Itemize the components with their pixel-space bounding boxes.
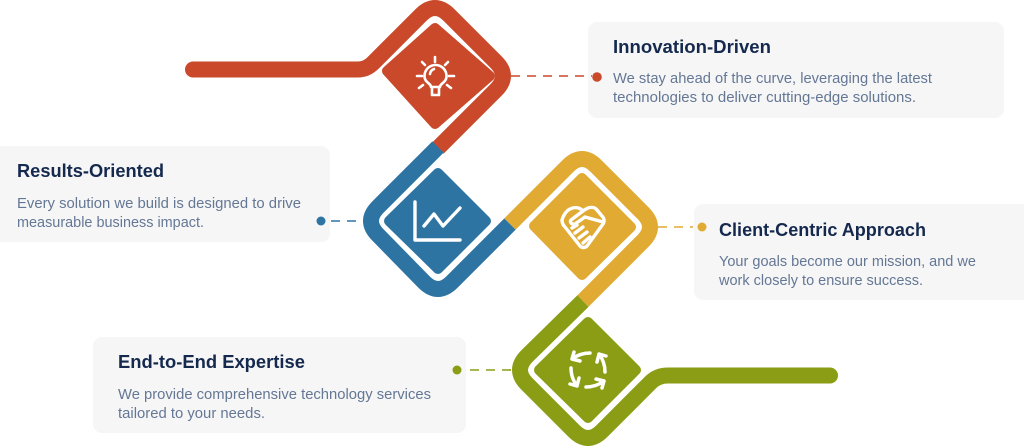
panel: results-oriented card — [0, 146, 330, 242]
icon: light bulb — [417, 57, 454, 95]
text: client description — [718, 254, 976, 289]
panel: end-to-end card — [93, 337, 466, 433]
diamond: blue — [389, 173, 486, 269]
text: client description: work closely to ensure success. — [718, 273, 923, 289]
heading: innovation-driven: Innovation-Driven — [613, 37, 771, 57]
diamond: red — [387, 28, 490, 124]
text: results description: Every solution we build is designed to drive — [17, 196, 301, 212]
text: innovation description — [613, 71, 932, 106]
text: client description: Your goals become our mission, and we — [719, 254, 976, 270]
text: end-to-end description: We provide comprehensive technology services — [118, 387, 431, 403]
text: end-to-end description — [118, 387, 431, 422]
icon: line chart — [415, 202, 460, 240]
text: end-to-end description: tailored to your needs. — [118, 406, 265, 422]
icon: handshake — [562, 207, 604, 248]
diamond: green — [539, 322, 636, 418]
text: results description — [17, 196, 301, 231]
text: results description: measurable business impact. — [17, 215, 204, 231]
connector: green dashed — [452, 366, 513, 374]
band: blue path — [371, 147, 510, 289]
text: innovation description: technologies to deliver cutting-edge solutions. — [613, 90, 916, 106]
connector: yellow dashed — [658, 222, 706, 232]
diamond: yellow — [534, 178, 631, 275]
band: green path — [520, 301, 838, 438]
icon: circular arrows — [570, 352, 606, 388]
panel: innovation-driven card — [588, 22, 1004, 118]
heading: client-centric approach: Client-Centric Approach — [719, 220, 926, 240]
panel: client-centric card — [694, 204, 1024, 300]
band: red path — [185, 8, 503, 148]
text: innovation description: We stay ahead of the curve, leveraging the latest — [613, 71, 932, 87]
connector: red dashed — [511, 72, 602, 82]
heading: results-oriented: Results-Oriented — [17, 161, 164, 181]
connector: blue dashed — [316, 216, 364, 226]
heading: end-to-end expertise: End-to-End Expertise — [118, 352, 305, 372]
band: yellow path — [510, 159, 650, 301]
